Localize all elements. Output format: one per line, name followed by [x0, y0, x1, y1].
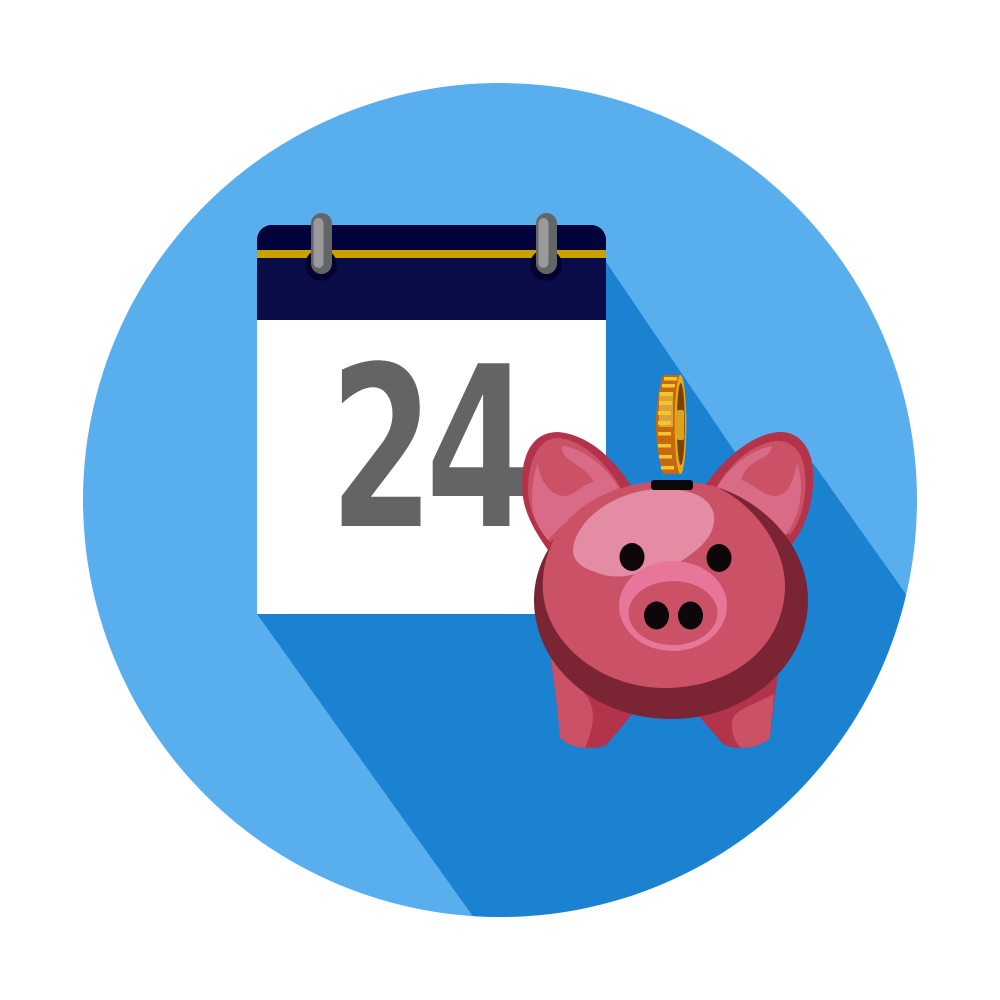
right binder ring: [530, 213, 562, 281]
left binder ring: [305, 213, 337, 281]
left ear: [522, 432, 632, 550]
right eye: [706, 544, 732, 572]
calendar header: [257, 225, 606, 320]
calendar page: [257, 300, 606, 614]
right ear: [705, 432, 813, 547]
icon: calendar: [257, 213, 606, 614]
long shadow: [257, 262, 915, 930]
coin slot: [651, 480, 693, 490]
icon: piggy bank: [522, 432, 813, 748]
gold stripe: [257, 250, 606, 258]
left leg: [550, 653, 640, 748]
date number: [329, 317, 534, 581]
date number: 2: [329, 318, 434, 581]
pig body: [534, 481, 808, 719]
snout: [619, 561, 727, 651]
face highlight: [573, 489, 714, 576]
pig face: [543, 481, 785, 688]
left eye: [620, 543, 644, 571]
icon: gold coin: [656, 375, 686, 474]
background circle: [83, 83, 917, 917]
date number: 4: [425, 317, 534, 581]
right leg: [692, 675, 778, 748]
